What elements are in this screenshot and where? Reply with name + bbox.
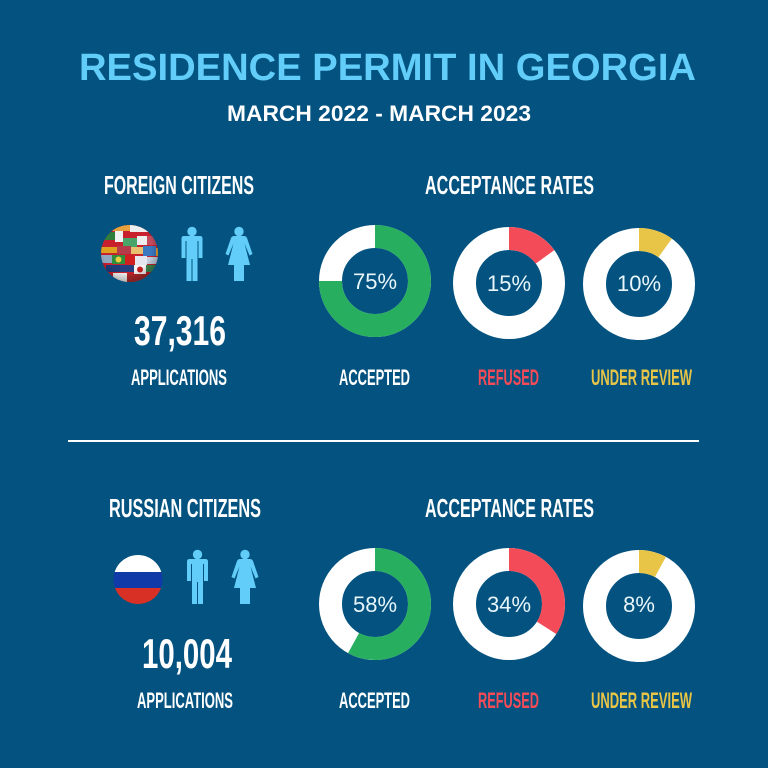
icon: russian flag bbox=[113, 555, 163, 605]
label: accepted: ACCEPTED bbox=[339, 688, 410, 713]
donut: russian under review 8%: 8% bbox=[623, 592, 655, 617]
donut: foreign refused 15% bbox=[464, 238, 554, 328]
heading: foreign citizens: FOREIGN CITIZENS bbox=[104, 170, 254, 200]
number: foreign applications: 37,316 bbox=[134, 307, 226, 354]
label: applications: APPLICATIONS bbox=[137, 688, 233, 713]
icon: woman bbox=[232, 550, 258, 604]
donut: foreign under review 10%: 10% bbox=[617, 271, 661, 296]
label: applications: APPLICATIONS bbox=[131, 365, 227, 390]
label: under review: UNDER REVIEW bbox=[591, 688, 692, 713]
heading: acceptance rates foreign: ACCEPTANCE RATES bbox=[425, 170, 594, 200]
donut: foreign accepted 75% bbox=[330, 236, 420, 326]
number: russian applications: 10,004 bbox=[142, 630, 232, 677]
heading: acceptance rates russian: ACCEPTANCE RATES bbox=[425, 493, 594, 523]
label: refused: REFUSED bbox=[478, 365, 539, 390]
heading: russian citizens: RUSSIAN CITIZENS bbox=[109, 493, 261, 523]
label: refused: REFUSED bbox=[478, 688, 539, 713]
icon: globe of flags bbox=[100, 224, 160, 284]
donut: russian accepted 58% bbox=[330, 560, 420, 648]
panel: russian citizens bbox=[109, 493, 261, 713]
icon: woman bbox=[226, 227, 252, 281]
donut: russian under review 8% bbox=[594, 562, 684, 650]
panel: foreign citizens bbox=[100, 170, 254, 390]
subtitle: MARCH 2022 - MARCH 2023 bbox=[227, 101, 531, 126]
donut: foreign refused 15%: 15% bbox=[487, 271, 531, 296]
divider bbox=[68, 440, 699, 442]
donut: russian accepted 58%: 58% bbox=[353, 592, 397, 617]
donut: foreign under review 10% bbox=[594, 240, 684, 328]
icon: man bbox=[187, 550, 208, 604]
label: under review: UNDER REVIEW bbox=[591, 365, 692, 390]
label: accepted: ACCEPTED bbox=[339, 365, 410, 390]
donut: russian refused 34%: 34% bbox=[487, 592, 531, 617]
donut: russian refused 34% bbox=[464, 560, 554, 648]
donut: foreign accepted 75%: 75% bbox=[353, 269, 397, 294]
title: RESIDENCE PERMIT IN GEORGIA bbox=[79, 47, 696, 89]
icon: man bbox=[182, 227, 202, 281]
